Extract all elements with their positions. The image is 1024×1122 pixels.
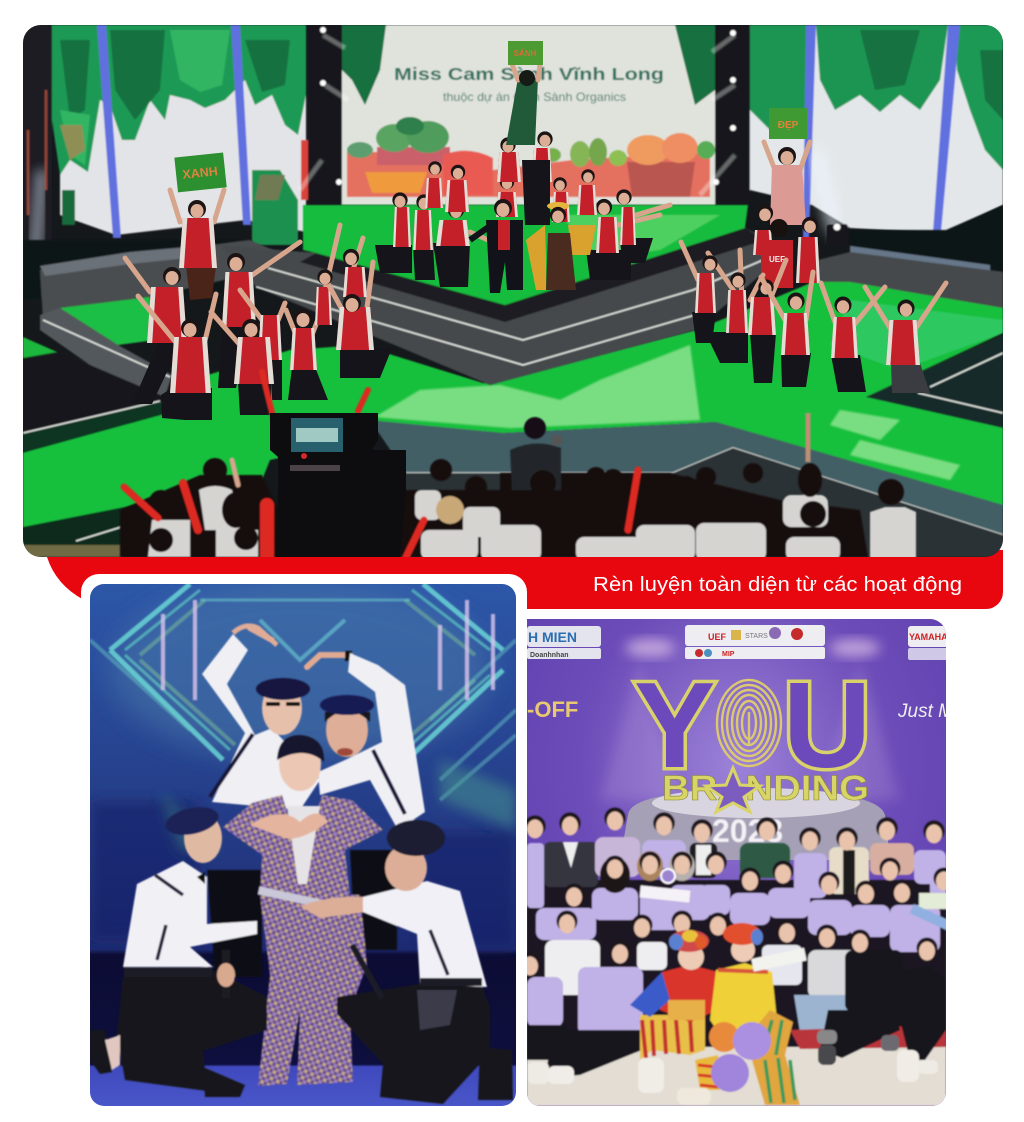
center performer in sequin suit — [223, 735, 383, 1086]
backdrop slogans: -OFF — [527, 697, 578, 722]
screen fruit art — [347, 117, 715, 197]
sponsor boards: H MIEN — [528, 629, 577, 645]
group of students — [520, 808, 954, 1106]
sign: XANH — [174, 152, 227, 192]
cameraman — [510, 417, 562, 490]
lifted woman with sign: SÁNH — [514, 49, 537, 58]
balloons — [709, 1022, 771, 1092]
back row — [524, 808, 946, 908]
woman in pink with sign: ĐẸP — [778, 120, 799, 131]
dark legs of rear performers — [207, 850, 397, 977]
backdrop slogans: Just M — [897, 701, 954, 722]
left edge column — [23, 25, 52, 290]
dancers: left group — [125, 152, 392, 420]
year 2023: 2023 — [712, 813, 783, 849]
backdrop slogans — [527, 697, 954, 722]
video camera — [270, 413, 406, 558]
middle row — [536, 851, 954, 952]
dark seating — [120, 473, 868, 557]
bottom-left floor edge — [23, 506, 130, 546]
dark side areas — [23, 240, 256, 300]
screen title: Miss Cam Sành Vĩnh Long — [394, 64, 664, 84]
stage backdrop — [23, 25, 1003, 246]
caption text: Rèn luyện toàn diện từ các hoạt động — [593, 574, 962, 596]
front right performer — [300, 820, 513, 1104]
front row — [520, 910, 946, 1050]
leaf canopy left — [52, 25, 306, 175]
LED strips — [97, 25, 960, 240]
dancers: right group: UEF — [769, 255, 785, 264]
YOU logo: U — [783, 657, 871, 793]
floor — [527, 1047, 946, 1106]
dancers: center group — [375, 41, 670, 293]
seating shadow — [527, 880, 946, 1048]
leaf canopy right — [750, 25, 1003, 170]
fingerprint — [717, 680, 781, 766]
audience — [120, 372, 916, 561]
screen subtitle: thuộc dự án Cam Sành Organics — [443, 90, 626, 104]
pedestal — [620, 788, 890, 860]
sponsor boards: Doanhnhan — [530, 652, 568, 659]
speckled floor border — [370, 420, 1003, 540]
YOU logo: Y — [634, 657, 715, 793]
sponsor boards: YAMAHA — [909, 632, 948, 642]
right spectators — [415, 413, 916, 561]
main green floor — [23, 282, 1003, 527]
sponsor boards — [527, 625, 948, 660]
front left performer — [90, 803, 267, 1097]
photo: stage performance — [23, 25, 1003, 561]
stage floor — [23, 205, 1003, 557]
YOU logo — [634, 657, 871, 793]
spotlights — [600, 639, 900, 800]
clowns — [630, 923, 800, 1105]
center platform — [220, 205, 790, 385]
back left performer — [202, 626, 320, 810]
dancers behind lift — [445, 180, 469, 212]
LED octagon background — [90, 580, 516, 950]
seated legs — [527, 1000, 946, 1078]
red cheer sticks — [124, 372, 638, 557]
back right performer — [307, 651, 425, 830]
dancers: right group — [681, 108, 946, 393]
photo: male group performance — [90, 580, 516, 1106]
woman in pink with sign — [764, 108, 810, 225]
handheld signs — [640, 869, 950, 972]
screen corner foliage — [342, 25, 715, 105]
lifted woman with sign — [506, 41, 543, 145]
red caption banner — [47, 550, 1003, 609]
BRANDING wordmark: BRANDING — [662, 769, 869, 808]
sponsor boards: STARS — [745, 633, 768, 640]
photo: YOU BRANDING group — [520, 619, 954, 1106]
right floor dark wedge — [866, 335, 1003, 428]
stage lights — [300, 27, 736, 195]
center screen — [342, 25, 715, 205]
woman in gold dress — [526, 202, 596, 290]
YOU logo: U — [783, 657, 871, 793]
shoes — [527, 1030, 938, 1105]
sign: XANH: XANH — [182, 164, 218, 182]
sponsor boards: MIP — [722, 651, 735, 658]
left spectators — [148, 458, 258, 557]
sponsor boards: UEF — [708, 632, 727, 642]
YOU logo: Y — [634, 657, 715, 793]
floor reflections — [375, 345, 960, 480]
man in black suit — [470, 199, 523, 293]
white card behind left photo — [81, 574, 527, 1122]
